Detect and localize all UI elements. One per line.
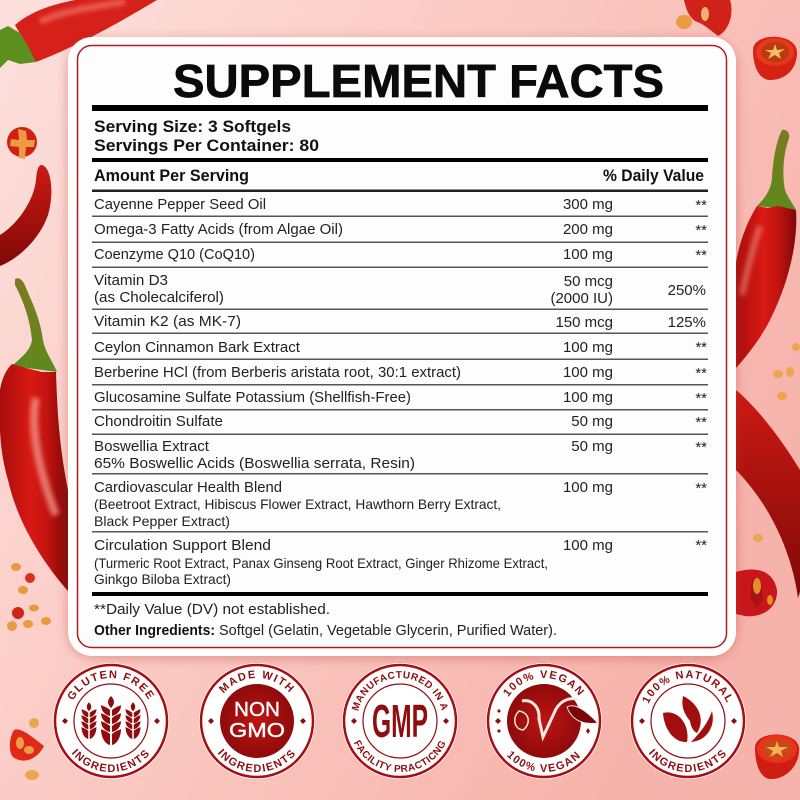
row: Cardiovascular blend: (Beetroot Extract, Hibiscus Flower Extract, Hawthorn Berry Extract, xyxy=(94,496,501,512)
row: Vitamin K2: 150 mcg xyxy=(555,314,613,331)
row: Cardiovascular blend: 100 mg xyxy=(563,479,613,496)
chili slice: bottom left xyxy=(10,718,44,780)
row: Boswellia: 65% Boswellic Acids (Boswellia serrata, Resin) xyxy=(94,455,415,472)
row: Cayenne Pepper Seed Oil: ** xyxy=(695,197,707,214)
row: Cardiovascular blend xyxy=(94,479,707,529)
row: Glucosamine xyxy=(94,389,707,407)
row: Cayenne Pepper Seed Oil: 300 mg xyxy=(563,196,613,213)
row: Cardiovascular blend: Cardiovascular Health Blend xyxy=(94,479,282,496)
row: Circulation blend: ** xyxy=(695,537,707,554)
chili seeds: lower left xyxy=(7,563,51,631)
row: Chondroitin: Chondroitin Sulfate xyxy=(94,413,223,430)
row: Coenzyme Q10: Coenzyme Q10 (CoQ10) xyxy=(94,246,255,263)
row: Vitamin D3: Vitamin D3 xyxy=(94,272,168,289)
row: Circulation blend: 100 mg xyxy=(563,537,613,554)
row: Glucosamine: ** xyxy=(695,390,707,407)
row: Omega-3 xyxy=(94,221,707,239)
chili slice: top right ring xyxy=(753,37,797,80)
row: Cayenne Pepper Seed Oil: Cayenne Pepper Seed Oil xyxy=(94,196,266,213)
row: Coenzyme Q10: 100 mg xyxy=(563,246,613,263)
badge: non gmo xyxy=(199,663,315,779)
row: Chondroitin: ** xyxy=(695,414,707,431)
row: Circulation blend xyxy=(94,537,707,587)
chili pepper: top left xyxy=(0,0,157,68)
badge: gluten free: INGREDIENTS xyxy=(72,748,149,772)
chili pepper: mid right xyxy=(736,390,800,598)
chili pepper: large left xyxy=(0,278,68,591)
row: Berberine: 100 mg xyxy=(563,364,613,381)
badge: natural: 100% NATURAL xyxy=(642,670,732,704)
row: Vitamin D3 xyxy=(94,272,706,307)
other ingredients: Other Ingredients: xyxy=(94,622,215,639)
badge: vegan xyxy=(486,663,602,779)
row: Ceylon Cinnamon xyxy=(94,339,707,356)
other ingredients: Softgel (Gelatin, Vegetable Glycerin, Purified Water). xyxy=(219,622,557,639)
badge: gmp xyxy=(342,663,458,779)
rule: title xyxy=(92,105,708,111)
row: Boswellia: Boswellia Extract xyxy=(94,438,210,455)
title: SUPPLEMENT FACTS xyxy=(173,55,664,107)
rows rules xyxy=(92,190,708,596)
badge: vegan: 100% VEGAN xyxy=(507,751,580,772)
table header: % Daily Value xyxy=(603,166,704,185)
badge: non gmo: MADE WITH xyxy=(218,670,294,694)
badge: gluten free xyxy=(53,663,169,779)
panel: supplement facts xyxy=(68,37,736,656)
panel shadow xyxy=(66,38,738,660)
row: Ceylon Cinnamon: Ceylon Cinnamon Bark Extract xyxy=(94,339,301,356)
icon: wheat xyxy=(82,696,140,745)
chili pepper: small left xyxy=(0,165,51,266)
row: Vitamin K2: Vitamin K2 (as MK-7) xyxy=(94,313,241,330)
row: Vitamin K2: 125% xyxy=(668,314,706,331)
row: Berberine xyxy=(94,364,707,382)
row: Glucosamine: 100 mg xyxy=(563,389,613,406)
row: Circulation blend: Circulation Support Blend xyxy=(94,537,271,554)
badge: gluten free: GLUTEN FREE xyxy=(68,670,154,700)
badge: natural xyxy=(630,663,746,779)
row: Ceylon Cinnamon: 100 mg xyxy=(563,339,613,356)
row: Omega-3: Omega-3 Fatty Acids (from Algae Oil) xyxy=(94,221,343,238)
icon: vegan leaf mark xyxy=(515,699,598,737)
row: Omega-3: ** xyxy=(695,222,707,239)
chili seeds: right xyxy=(753,343,800,542)
badge: non gmo: GMO xyxy=(229,720,285,742)
footnote: **Daily Value (DV) not established. xyxy=(94,601,330,618)
chili slice: lower right xyxy=(736,570,777,616)
row: Glucosamine: Glucosamine Sulfate Potassium (Shellfish-Free) xyxy=(94,389,411,406)
row: Circulation blend: (Turmeric Root Extract, Panax Ginseng Root Extract, Ginger Rhizome Extract, xyxy=(94,555,548,571)
row: Circulation blend: Ginkgo Biloba Extract) xyxy=(94,571,231,587)
chili pepper: upper right xyxy=(736,130,796,368)
panel outer card xyxy=(68,37,736,656)
serving information: Serving Size: 3 Softgels xyxy=(94,117,291,136)
row: Omega-3: 200 mg xyxy=(563,221,613,238)
icon: leaves xyxy=(663,696,713,742)
chili slice: top right xyxy=(676,0,732,36)
row: Vitamin D3: (as Cholecalciferol) xyxy=(94,289,224,306)
badge: gmp: GMP xyxy=(372,695,428,747)
panel red border xyxy=(78,46,726,648)
row: Boswellia: ** xyxy=(695,439,707,456)
badge: gmp: MANUFACTURED IN A xyxy=(352,671,448,711)
row: Cayenne Pepper Seed Oil xyxy=(94,196,707,214)
table header: Amount Per Serving xyxy=(94,166,249,185)
badge: non gmo: INGREDIENTS xyxy=(218,748,295,772)
row: Ceylon Cinnamon: ** xyxy=(695,339,707,356)
row: Vitamin K2 xyxy=(94,313,706,331)
row: Cardiovascular blend: Black Pepper Extract) xyxy=(94,513,230,529)
serving information xyxy=(94,117,319,155)
row: Coenzyme Q10 xyxy=(94,246,707,264)
chili slice: bottom right xyxy=(755,734,799,779)
row: Cardiovascular blend: ** xyxy=(695,480,707,497)
serving information: Servings Per Container: 80 xyxy=(94,136,319,155)
row: Chondroitin xyxy=(94,413,707,431)
rule: serving xyxy=(92,158,708,162)
row: Berberine: ** xyxy=(695,365,707,382)
row: Chondroitin: 50 mg xyxy=(571,413,613,430)
row: Vitamin D3: (2000 IU) xyxy=(550,290,613,307)
badge: gmp: FACILITY PRACTICNG xyxy=(354,740,445,772)
row: Vitamin D3: 250% xyxy=(668,282,706,299)
row: Coenzyme Q10: ** xyxy=(695,247,707,264)
row: Boswellia: 50 mg xyxy=(571,438,613,455)
row: Boswellia xyxy=(94,438,707,472)
badge: non gmo: NON xyxy=(234,699,280,721)
row: Vitamin D3: 50 mcg xyxy=(564,273,613,290)
badge: natural: INGREDIENTS xyxy=(648,748,726,772)
row: Berberine: Berberine HCl (from Berberis aristata root, 30:1 extract) xyxy=(94,364,461,381)
chili slice: upper left xyxy=(7,127,37,159)
badge: vegan: 100% VEGAN xyxy=(504,670,584,697)
table header xyxy=(94,166,704,185)
